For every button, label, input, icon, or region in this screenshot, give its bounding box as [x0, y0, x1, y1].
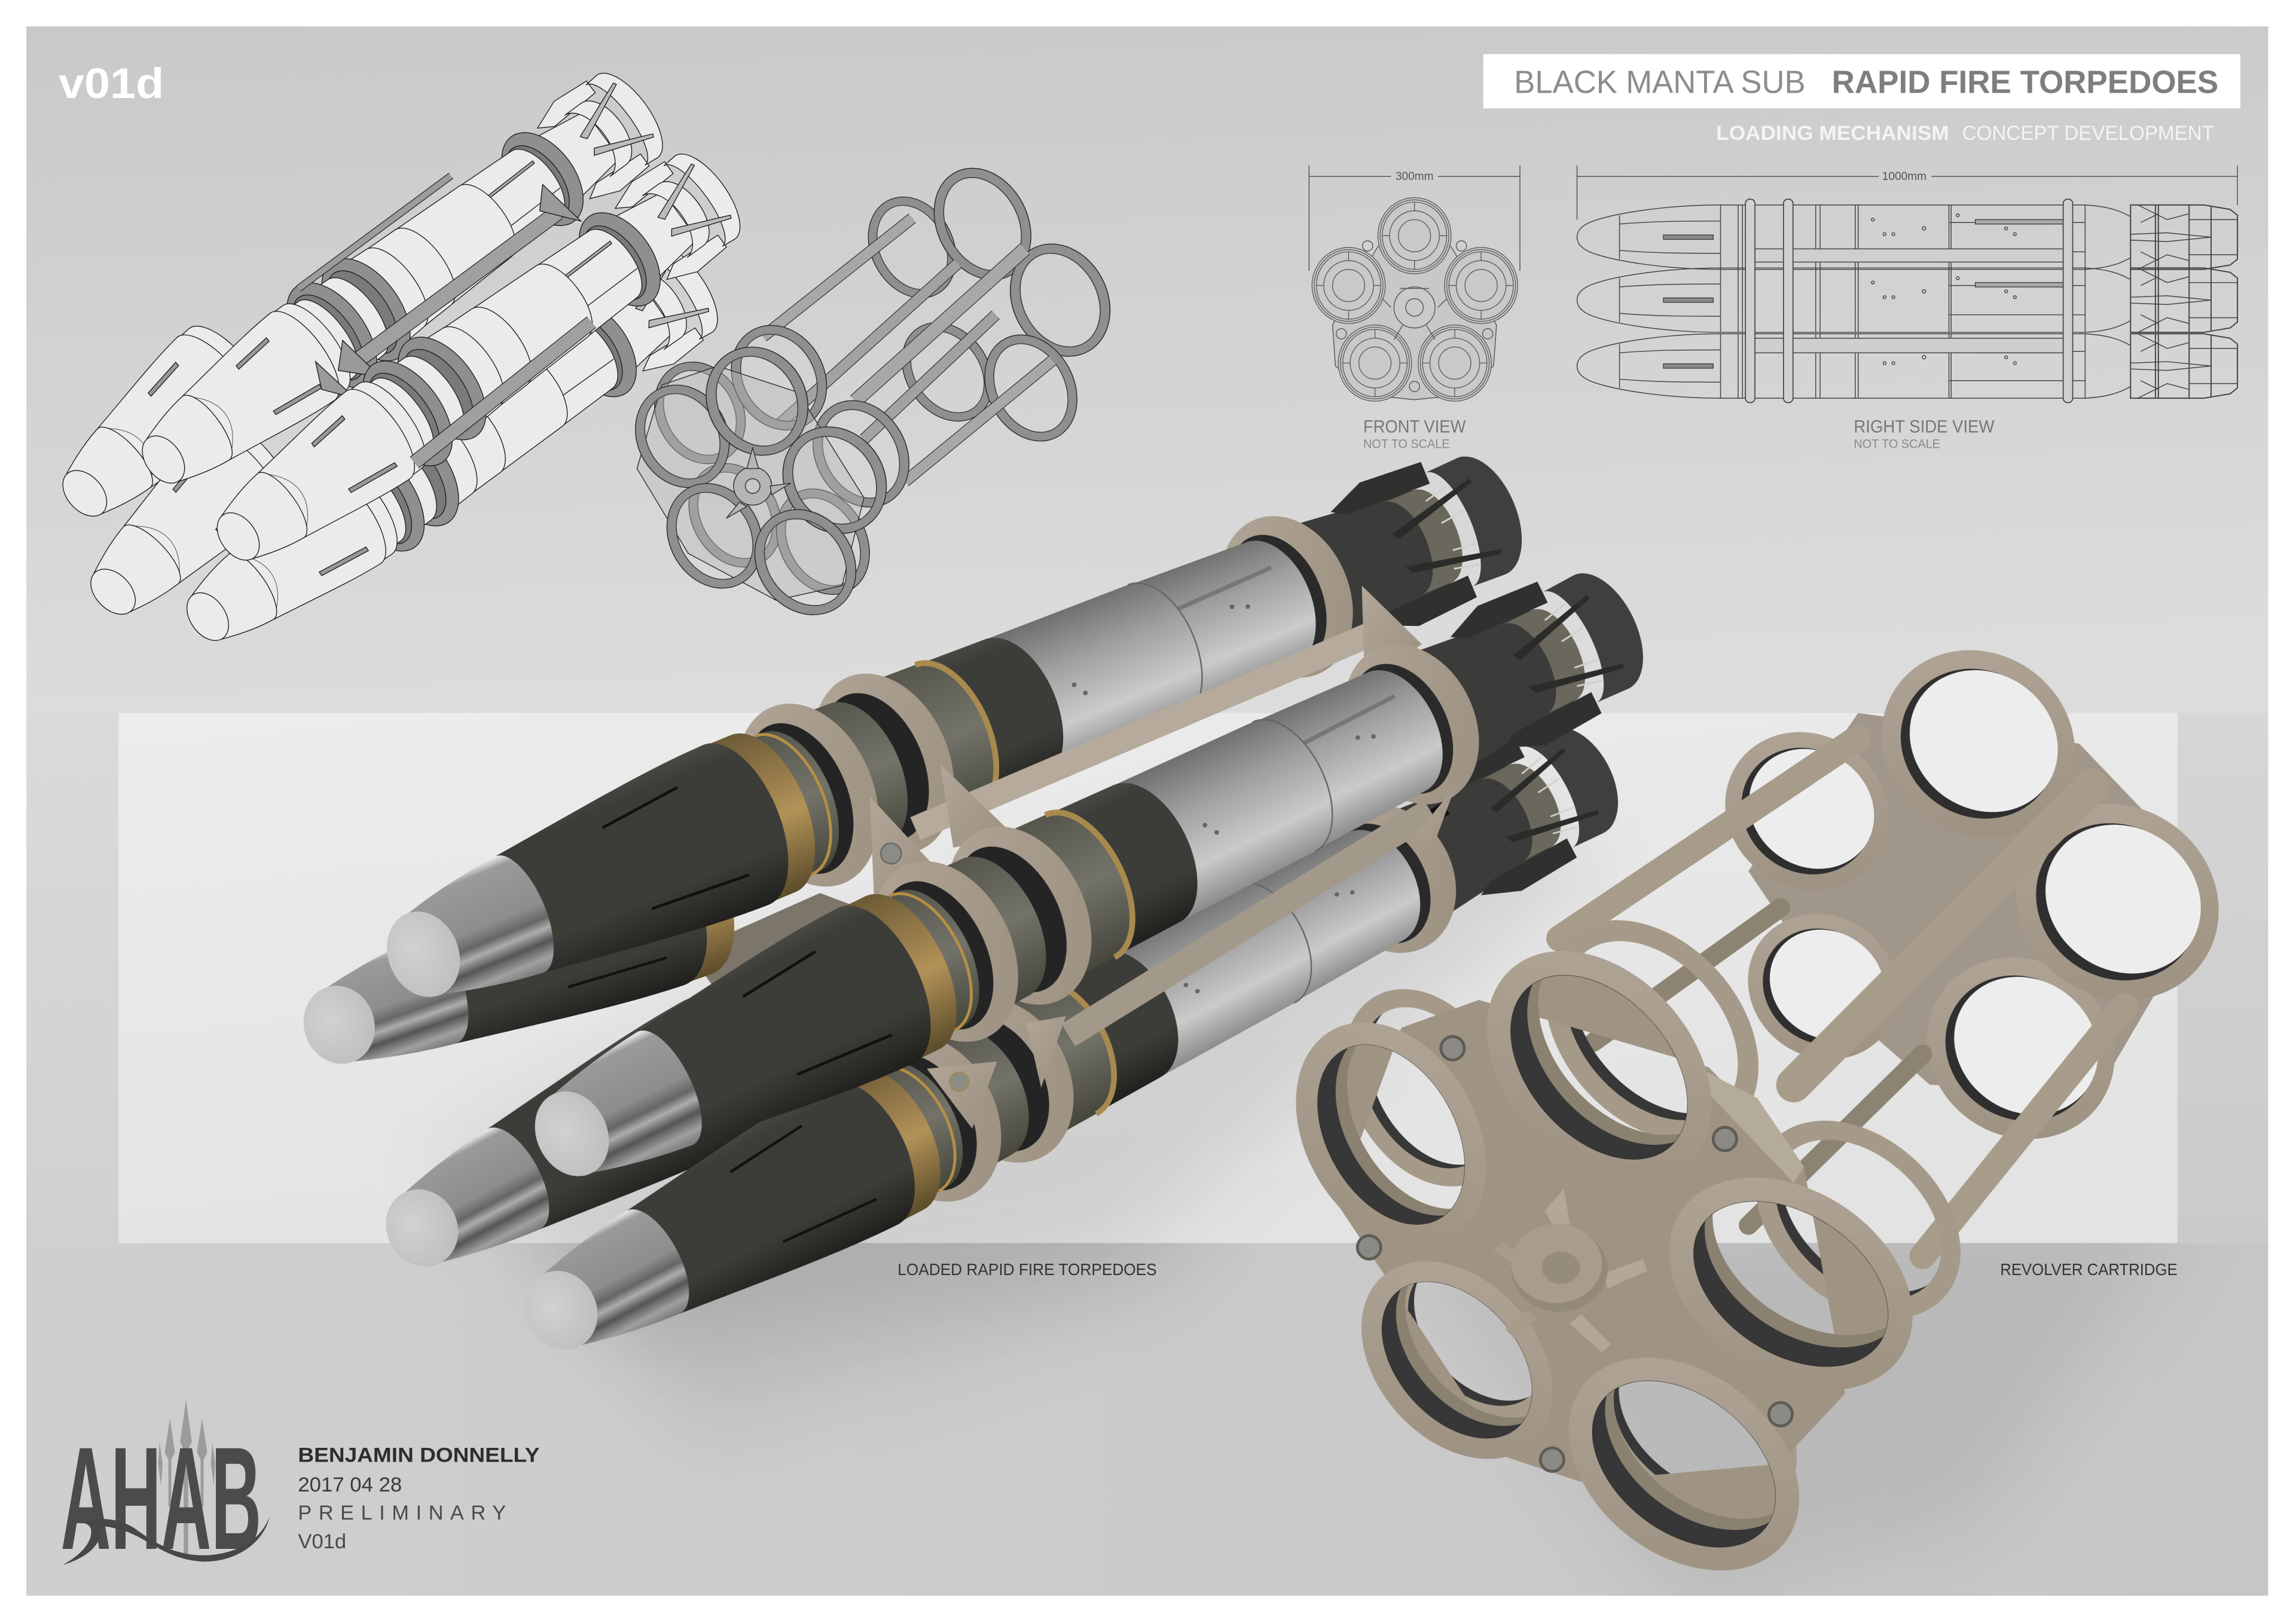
line art torpedo, top — [114, 55, 680, 518]
torpedo, centre — [499, 531, 1674, 1235]
title box: RAPID FIRE TORPEDOES — [1832, 65, 2218, 100]
wire rear rings — [857, 158, 1122, 451]
subtitle: LOADING MECHANISM — [1716, 122, 1949, 145]
upper rod — [915, 628, 1385, 829]
shadowed gap between torpedoes — [1010, 662, 1479, 952]
torpedo, upper — [355, 415, 1550, 1056]
note: not to scale: NOT TO SCALE — [1363, 437, 1449, 451]
dimension: 300mm: 300mm — [1396, 170, 1434, 183]
caption: revolver cartridge: REVOLVER CARTRIDGE — [2000, 1260, 2178, 1279]
black slit under lower part — [1076, 802, 1449, 1037]
black slit under upper rod — [996, 762, 1297, 910]
wire rods — [763, 218, 1053, 482]
torpedo, rear left — [280, 814, 753, 1109]
trident — [158, 1399, 215, 1555]
front plate — [1307, 963, 1898, 1557]
side view torpedoes — [1577, 205, 2237, 398]
note: not to scale: NOT TO SCALE — [1854, 437, 1940, 451]
front tab — [1706, 1072, 1804, 1183]
rear plate — [1748, 713, 2163, 1091]
line art lower rod — [414, 322, 591, 463]
side view cartridge rings — [1745, 199, 2073, 403]
dimension: 1000mm: 1000mm — [1882, 170, 1926, 183]
inner rods — [1593, 907, 1923, 1225]
credits block — [298, 1444, 540, 1553]
soft shadows on band — [494, 801, 1573, 1341]
credits block: BENJAMIN DONNELLY — [298, 1444, 540, 1467]
title box: BLACK MANTA SUB — [1514, 65, 1806, 100]
grey backdrop: left side — [26, 713, 118, 1243]
line art torpedo, centre — [189, 136, 758, 595]
hub — [1494, 1189, 1647, 1353]
front view hub — [1382, 287, 1447, 340]
main render: revolver cartridge — [1257, 613, 2257, 1614]
middle rings — [1310, 878, 1999, 1559]
upper mounting plates — [870, 586, 1422, 902]
front view bolts — [1336, 241, 1493, 392]
text: AHAB — [61, 1416, 261, 1580]
bolts — [1357, 1037, 1793, 1471]
credits block: 2017 04 28 — [298, 1474, 402, 1496]
lower rod — [1068, 811, 1431, 1035]
side view rods — [1754, 249, 2069, 353]
soft ground shadows — [629, 1243, 2145, 1585]
subtitle: CONCEPT DEVELOPMENT — [1962, 122, 2214, 145]
grey backdrop: right side — [2178, 713, 2268, 1243]
main render: loaded rapid fire torpedoes — [280, 415, 1674, 1404]
line art: revolver cartridge — [624, 158, 1122, 628]
credits block: PRELIMINARY — [298, 1502, 506, 1524]
wire middle rings — [643, 314, 921, 606]
torpedo, rear lower — [355, 966, 822, 1313]
grey backdrop: lower area — [26, 1243, 2268, 1596]
line art rods — [299, 176, 558, 359]
light horizontal band — [118, 713, 2178, 1243]
logo swoosh — [63, 1517, 270, 1565]
wire front rings — [624, 335, 901, 628]
wire front plate — [637, 366, 864, 600]
logo: AHAB — [61, 1399, 270, 1580]
dimension: 300mm — [1309, 166, 1520, 271]
caption: loaded torpedoes: LOADED RAPID FIRE TORPEDOES — [897, 1260, 1157, 1279]
subtitle — [1716, 122, 2214, 145]
right side view drawing — [1577, 166, 2237, 451]
outer rods — [1559, 738, 2124, 1256]
grey backdrop: upper area — [26, 26, 2268, 714]
version tag: v01d — [59, 60, 164, 108]
front view rings — [1312, 198, 1518, 401]
label: right side view: RIGHT SIDE VIEW — [1854, 417, 1995, 437]
lower mounting plates — [927, 786, 1455, 1129]
front rings — [1257, 889, 1967, 1614]
rear rings — [1694, 613, 2257, 1176]
line art torpedo, rear lower — [63, 407, 301, 643]
title box — [1483, 54, 2240, 108]
line art torpedo, bottom — [159, 228, 735, 676]
torpedo, lower front — [490, 687, 1648, 1404]
front view plate — [1333, 199, 1497, 400]
credits block: V01d — [298, 1530, 346, 1553]
label: front view: FRONT VIEW — [1363, 417, 1466, 437]
front view drawing — [1309, 166, 1520, 451]
line art torpedo, rear left — [35, 313, 277, 545]
wire hub — [726, 448, 790, 518]
line art: loaded torpedoes — [35, 55, 758, 676]
hub plate behind torpedoes — [688, 893, 937, 1069]
line art plates, upper — [316, 185, 581, 398]
dimension: 1000mm — [1577, 166, 2237, 219]
